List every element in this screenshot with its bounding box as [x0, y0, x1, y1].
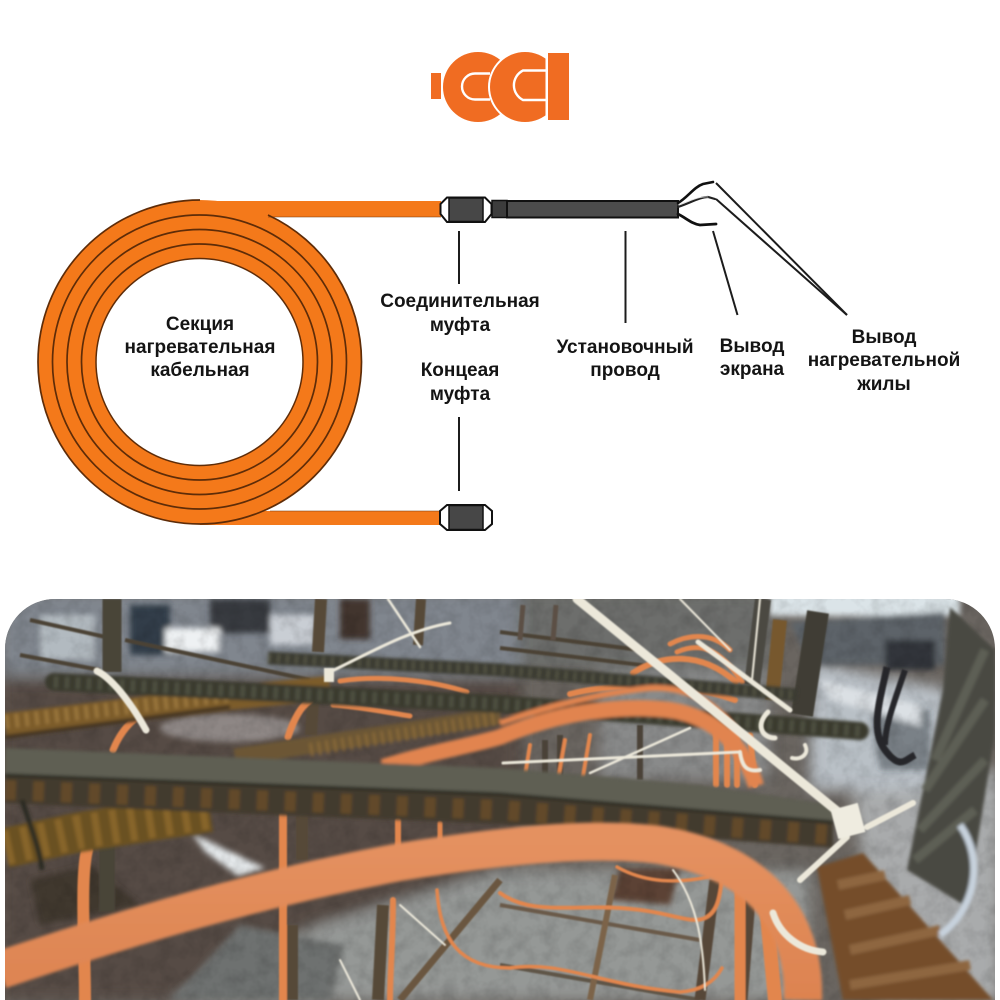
rebar bars [5, 658, 860, 870]
end sleeve [440, 505, 492, 530]
label: screen lead: Вывод [720, 336, 784, 357]
heating cable coil [38, 200, 441, 525]
medium cable [383, 708, 756, 786]
coil label: Секция [166, 314, 234, 335]
label: installation wire [556, 337, 694, 381]
logo [431, 50, 569, 124]
cable diagram [38, 182, 960, 530]
label: end sleeve: Концеая [421, 360, 499, 381]
main foreground rebar [5, 748, 833, 848]
big foreground cable [0, 842, 803, 1000]
rear rust rebar [5, 812, 210, 848]
coil label: кабельная [150, 360, 250, 381]
coil label: нагревательная [125, 337, 275, 358]
label: installation wire: Установочный [556, 337, 694, 358]
long dark rebar [54, 682, 860, 731]
label: heating core lead: нагревательной [808, 350, 960, 371]
label: end sleeve: муфта [430, 384, 491, 405]
wire tie left [22, 800, 42, 870]
photo: heating cable tied to rebar cage [0, 590, 1000, 1000]
wire leads [678, 182, 716, 225]
label: heating core lead [808, 327, 960, 395]
mid rust rebar [235, 716, 500, 757]
foreground elements [0, 607, 995, 1000]
connecting sleeve [440, 198, 492, 222]
coil label [125, 314, 275, 381]
label: connecting sleeve: Соединительная [380, 291, 540, 312]
label: heating core lead: жилы [856, 374, 911, 395]
photo background [0, 590, 1000, 1000]
upper dark rebar [268, 658, 797, 695]
white cable ties [97, 599, 913, 1000]
cable tie right [940, 825, 974, 935]
label: heating core lead: Вывод [852, 327, 916, 348]
label: screen lead: экрана [720, 359, 785, 380]
rust rebar left [5, 688, 330, 737]
installation wire [492, 200, 678, 218]
label: connecting sleeve: муфта [430, 315, 491, 336]
label: connecting sleeve [380, 291, 540, 336]
label: screen lead [720, 336, 785, 380]
leader lines [459, 183, 847, 491]
label: installation wire: провод [590, 360, 660, 381]
foreground rust rebar [817, 853, 993, 1000]
label: end sleeve [421, 360, 499, 405]
big right rebar [907, 607, 995, 907]
far rebar cage and thin cables [20, 599, 915, 1000]
